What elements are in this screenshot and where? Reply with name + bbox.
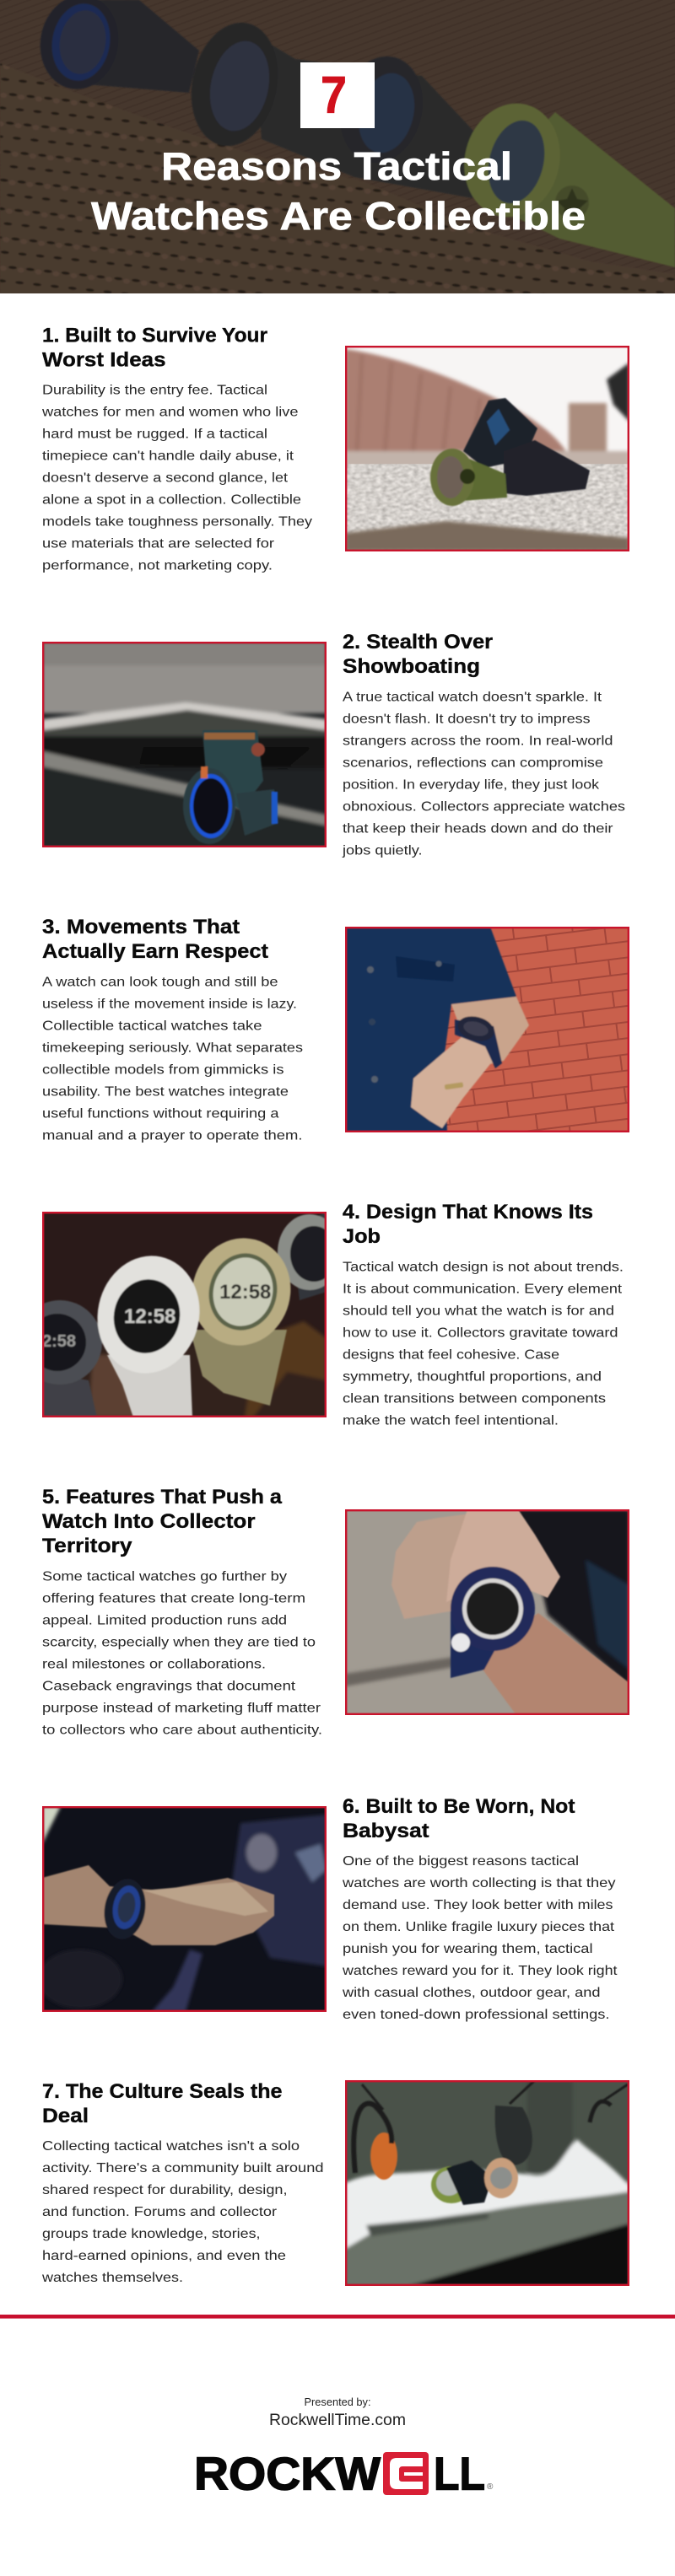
body text 2: that keep their heads down and do their bbox=[343, 821, 613, 836]
body text 3: usability. The best watches integrate bbox=[42, 1084, 289, 1100]
section 1 bbox=[41, 324, 629, 573]
body text 5: offering features that create long-term bbox=[42, 1592, 305, 1605]
heading 3: 3. Movements That bbox=[42, 916, 240, 938]
body text 1: models take toughness personally. They bbox=[42, 514, 312, 530]
body text 5: appeal. Limited production runs add bbox=[42, 1614, 287, 1627]
section 5 bbox=[42, 1486, 629, 1737]
body text 3: useless if the movement inside is lazy. bbox=[42, 997, 297, 1012]
body text 1: hard must be rugged. If a tactical bbox=[42, 427, 267, 442]
body text 6: with casual clothes, outdoor gear, and bbox=[342, 1986, 601, 2000]
photo 4: row of digital watches: 12:58 bbox=[219, 1281, 271, 1304]
body text 7: and function. Forums and collector bbox=[42, 2205, 278, 2219]
body text 5: real milestones or collaborations. bbox=[42, 1658, 266, 1671]
photo 4: row of digital watches bbox=[18, 1212, 342, 1417]
body text 6 bbox=[342, 1854, 618, 2022]
hero photo: row of watches on knit fabric bbox=[0, 0, 675, 293]
body text 7: watches themselves. bbox=[41, 2271, 183, 2285]
footer bbox=[194, 2396, 494, 2499]
heading 7: 7. The Culture Seals the bbox=[42, 2080, 282, 2103]
presented by credit: Presented by: bbox=[304, 2396, 371, 2408]
heading 2: 2. Stealth Over bbox=[343, 631, 493, 653]
body text 3: Collectible tactical watches take bbox=[42, 1019, 262, 1034]
body text 6: on them. Unlike fragile luxury pieces that bbox=[343, 1920, 615, 1934]
body text 4: clean transitions between components bbox=[343, 1391, 606, 1406]
heading 1: Worst Ideas bbox=[42, 349, 165, 371]
body text 6: watches reward you for it. They look right bbox=[342, 1964, 618, 1978]
body text 4: Tactical watch design is not about trends. bbox=[343, 1260, 624, 1275]
body text 1: use materials that are selected for bbox=[42, 536, 275, 551]
body text 7: activity. There's a community built around bbox=[42, 2161, 324, 2175]
body text 2: scenarios, reflections can compromise bbox=[343, 756, 603, 771]
heading 7: Deal bbox=[42, 2105, 89, 2127]
body text 5: scarcity, especially when they are tied to bbox=[42, 1636, 316, 1649]
heading 4: Job bbox=[343, 1225, 381, 1248]
logo: Rockwell: ROCKW bbox=[194, 2447, 381, 2499]
title: Reasons Tactical bbox=[161, 144, 512, 188]
heading 5: 5. Features That Push a bbox=[42, 1486, 283, 1508]
body text 2: jobs quietly. bbox=[342, 843, 422, 858]
body text 3 bbox=[42, 975, 303, 1143]
number badge: 7 bbox=[321, 67, 347, 125]
photo 1: watches on snowy stone bbox=[345, 346, 629, 551]
presented by credit bbox=[269, 2396, 406, 2429]
heading 4: 4. Design That Knows Its bbox=[343, 1201, 593, 1223]
body text 1 bbox=[41, 383, 312, 573]
body text 6: One of the biggest reasons tactical bbox=[343, 1854, 579, 1869]
body text 7: Collecting tactical watches isn't a solo bbox=[42, 2139, 300, 2154]
presented by credit: RockwellTime.com bbox=[269, 2412, 406, 2429]
photo 3: arm against red brick wall bbox=[345, 927, 629, 1132]
title bbox=[91, 144, 586, 238]
heading 1: 1. Built to Survive Your bbox=[42, 324, 267, 347]
hero banner bbox=[0, 0, 675, 293]
section 3 bbox=[42, 916, 629, 1143]
body text 5: Caseback engravings that document bbox=[42, 1680, 296, 1693]
body text 7: groups trade knowledge, stories, bbox=[42, 2227, 260, 2241]
heading 7 bbox=[42, 2080, 282, 2127]
body text 4 bbox=[343, 1260, 624, 1428]
photo 4: row of digital watches: 12:58 bbox=[124, 1305, 176, 1328]
body text 1: Durability is the entry fee. Tactical bbox=[42, 383, 267, 398]
body text 5 bbox=[42, 1570, 322, 1737]
body text 1: watches for men and women who live bbox=[41, 405, 299, 420]
body text 3: manual and a prayer to operate them. bbox=[42, 1128, 302, 1143]
section 4 bbox=[18, 1201, 624, 1428]
body text 3: useful functions without requiring a bbox=[42, 1106, 279, 1121]
photo 2: watch on dark ledge bbox=[42, 642, 327, 847]
body text 6: demand use. They look better with miles bbox=[343, 1898, 613, 1912]
heading 3 bbox=[42, 916, 268, 963]
photo 4: row of digital watches: 2:58 bbox=[42, 1332, 76, 1351]
heading 4 bbox=[343, 1201, 593, 1248]
body text 4: how to use it. Collectors gravitate toward bbox=[343, 1326, 618, 1341]
heading 1 bbox=[42, 324, 267, 371]
title: Watches Are Collectible bbox=[91, 194, 586, 238]
number badge bbox=[300, 62, 375, 128]
body text 1: doesn't deserve a second glance, let bbox=[42, 471, 289, 486]
body text 6: even toned-down professional settings. bbox=[343, 2008, 609, 2022]
body text 1: alone a spot in a collection. Collectible bbox=[42, 492, 301, 508]
body text 5: to collectors who care about authenticity. bbox=[42, 1724, 322, 1737]
heading 5 bbox=[42, 1486, 283, 1557]
body text 2: position. In everyday life, they just look bbox=[343, 777, 600, 793]
body text 4: make the watch feel intentional. bbox=[343, 1413, 559, 1428]
body text 7: shared respect for durability, design, bbox=[42, 2183, 287, 2197]
body text 4: designs that feel cohesive. Case bbox=[343, 1347, 559, 1363]
body text 2: doesn't flash. It doesn't try to impress bbox=[343, 712, 591, 727]
body text 1: timepiece can't handle daily abuse, it bbox=[42, 449, 294, 464]
body text 4: should tell you what the watch is for and bbox=[343, 1304, 614, 1319]
photo 7: watches on snowy green ledge bbox=[345, 2080, 629, 2286]
heading 6 bbox=[343, 1795, 575, 1842]
logo: Rockwell: LL bbox=[434, 2447, 485, 2499]
heading 2 bbox=[343, 631, 493, 678]
body text 5: purpose instead of marketing fluff matter bbox=[42, 1702, 321, 1715]
heading 5: Watch Into Collector bbox=[42, 1510, 255, 1533]
body text 4: It is about communication. Every element bbox=[343, 1282, 623, 1297]
heading 5: Territory bbox=[42, 1535, 132, 1557]
body text 7 bbox=[41, 2139, 323, 2285]
body text 3: collectible models from gimmicks is bbox=[42, 1062, 284, 1078]
body text 2: strangers across the room. In real-world bbox=[343, 734, 613, 749]
heading 2: Showboating bbox=[343, 655, 480, 678]
photo 6: officer arm with watch bbox=[38, 1806, 327, 2012]
red divider bbox=[0, 2315, 675, 2319]
heading 6: 6. Built to Be Worn, Not bbox=[343, 1795, 575, 1818]
body text 6: punish you for wearing them, tactical bbox=[343, 1942, 592, 1956]
body text 5: Some tactical watches go further by bbox=[42, 1570, 287, 1584]
heading 3: Actually Earn Respect bbox=[42, 940, 268, 963]
logo: Rockwell bbox=[194, 2447, 494, 2499]
photo 5: hand adjusting watch on wrist bbox=[345, 1509, 629, 1715]
logo: Rockwell: ® bbox=[487, 2482, 494, 2492]
heading 6: Babysat bbox=[343, 1820, 429, 1842]
body text 7: hard-earned opinions, and even the bbox=[42, 2249, 286, 2263]
body text 2: obnoxious. Collectors appreciate watches bbox=[343, 799, 625, 815]
body text 4: symmetry, thoughtful proportions, and bbox=[343, 1369, 602, 1385]
section 2 bbox=[42, 631, 625, 858]
body text 3: timekeeping seriously. What separates bbox=[42, 1041, 303, 1056]
body text 2: A true tactical watch doesn't sparkle. It bbox=[343, 690, 602, 705]
body text 2 bbox=[342, 690, 625, 858]
body text 1: performance, not marketing copy. bbox=[42, 558, 273, 573]
body text 6: watches are worth collecting is that they bbox=[342, 1876, 616, 1890]
section 6 bbox=[38, 1795, 618, 2022]
section 7 bbox=[41, 2080, 629, 2286]
body text 3: A watch can look tough and still be bbox=[42, 975, 278, 990]
